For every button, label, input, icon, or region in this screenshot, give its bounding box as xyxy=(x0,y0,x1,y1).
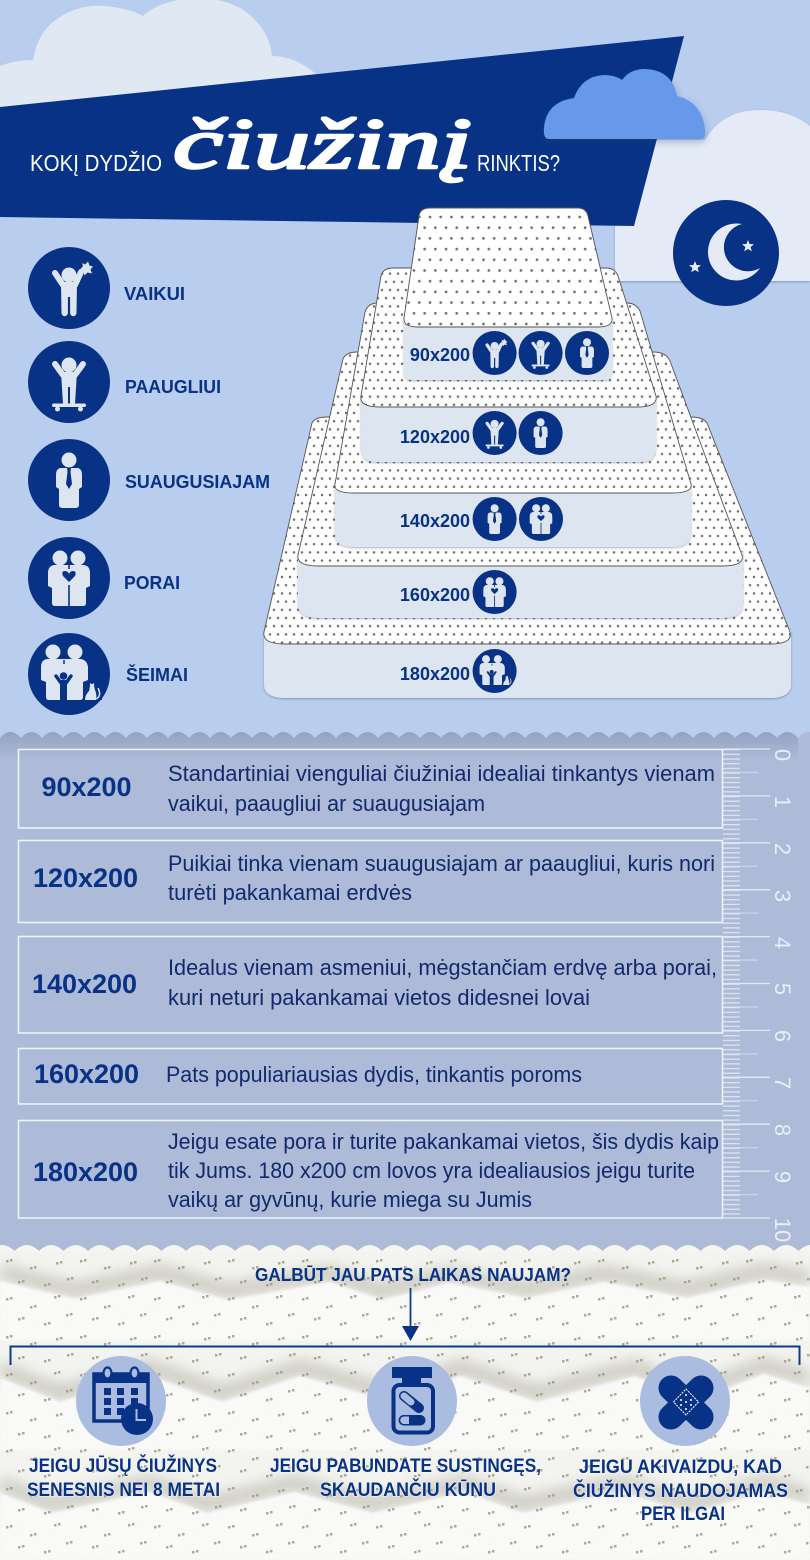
size row 120x200 xyxy=(18,840,722,922)
size row 140x200 xyxy=(18,936,722,1033)
size row 120x200: turėti pakankamai erdvės xyxy=(168,880,412,905)
legend item: child: VAIKUI xyxy=(124,283,185,304)
size row 180x200 xyxy=(18,1120,722,1218)
icon: pill bottle xyxy=(367,1356,457,1446)
mattress stack xyxy=(264,208,791,698)
size row 160x200 xyxy=(18,1048,722,1104)
legend item: adult: SUAUGUSIAJAM xyxy=(125,471,270,492)
size row 90x200: Standartiniai vienguliai čiužiniai idealiai tinkantys vienam xyxy=(168,761,715,786)
sign: stiffness: SKAUDANČIU KŪNU xyxy=(320,1479,496,1501)
mattress 140x200 xyxy=(335,303,691,547)
size row 180x200: 180x200 xyxy=(33,1157,138,1187)
bracket xyxy=(10,1346,800,1365)
mattress 180x200 xyxy=(264,417,791,698)
size row 120x200: 120x200 xyxy=(33,863,138,893)
size label 140x200: 140x200 xyxy=(400,511,470,531)
panel: size descriptions background xyxy=(0,732,810,1260)
icon: child xyxy=(473,331,517,375)
sign: calendar: SENESNIS NEI 8 METAI xyxy=(27,1480,220,1501)
arrow xyxy=(402,1288,419,1341)
icon: teen xyxy=(473,411,517,455)
icon: adult xyxy=(473,497,517,541)
legend item: child xyxy=(28,247,185,329)
size label 120x200: 120x200 xyxy=(400,427,470,447)
sky background xyxy=(0,0,810,745)
caption: JEIGU AKIVAIZDU, KAD xyxy=(579,1457,782,1478)
legend item: teen xyxy=(28,341,221,423)
ruler numbers: 10 xyxy=(770,1218,795,1242)
sign: stiffness xyxy=(270,1356,541,1501)
legend item: family xyxy=(28,633,188,715)
icon: couple xyxy=(519,497,563,541)
legend item: couple: PORAI xyxy=(124,572,180,593)
cloud: top left xyxy=(0,0,316,110)
size row 90x200: 90x200 xyxy=(41,772,132,802)
icon: adult xyxy=(565,331,609,375)
ruler numbers xyxy=(770,749,795,1242)
ruler numbers: 0 xyxy=(770,749,795,761)
mattress 120x200 xyxy=(361,268,656,462)
size label 180x200: 180x200 xyxy=(400,664,470,684)
legend item: teen: PAAUGLIUI xyxy=(125,376,221,397)
size row 180x200: vaikų ar gyvūnų, kurie miega su Jumis xyxy=(168,1187,532,1212)
ruler numbers: 9 xyxy=(770,1171,795,1183)
size row 90x200: vaikui, paaugliui ar suaugusiajam xyxy=(168,791,485,816)
size row 120x200: Puikiai tinka vienam suaugusiajam ar paaugliui, kuris nori xyxy=(168,851,715,876)
ruler numbers: 8 xyxy=(770,1124,795,1136)
size row 140x200: Idealus vienam asmeniui, mėgstančiam erdvę arba porai, xyxy=(168,955,717,980)
ruler numbers: 1 xyxy=(770,796,795,808)
legend: audience types xyxy=(28,247,270,715)
mattress 90x200 xyxy=(404,208,612,380)
size row 180x200: Jeigu esate pora ir turite pakankamai vietos, šis dydis kaip xyxy=(168,1129,719,1154)
caption: JEIGU PABUNDATE SUSTINGĘS, xyxy=(270,1456,541,1477)
legend item: couple xyxy=(28,537,180,619)
title: lead-in: KOKĮ DYDŽIO xyxy=(30,150,162,176)
ruler numbers: 5 xyxy=(770,983,795,995)
size row 140x200: kuri neturi pakankamai vietos didesnei lovai xyxy=(168,985,590,1010)
mattress 160x200 xyxy=(298,352,743,618)
size row 180x200: tik Jums. 180 x200 cm lovos yra idealiausios jeigu turite xyxy=(168,1158,695,1183)
sign: worn mattress: ČIUŽINYS NAUDOJAMAS xyxy=(573,1480,788,1502)
ruler numbers: 3 xyxy=(770,890,795,902)
icon: calendar and clock xyxy=(76,1356,166,1446)
size row 90x200 xyxy=(18,750,722,828)
size row 160x200: Pats populiariausias dydis, tinkantis poroms xyxy=(166,1062,582,1087)
title banner xyxy=(0,36,684,226)
icon: bandage xyxy=(640,1356,730,1446)
caption: JEIGU JŪSŲ ČIUŽINYS xyxy=(29,1455,217,1477)
ruler xyxy=(723,749,795,1242)
title: tail: RINKTIS? xyxy=(477,150,560,176)
size row 160x200: 160x200 xyxy=(34,1059,139,1089)
title: main word: čiužinį xyxy=(173,104,472,184)
sign: worn mattress: PER ILGAI xyxy=(641,1504,725,1525)
cloud: blue xyxy=(544,69,705,139)
sign: calendar xyxy=(27,1356,220,1501)
size label 90x200: 90x200 xyxy=(410,345,470,365)
heading: replacement question: GALBŪT JAU PATS LAIKAS NAUJAM? xyxy=(255,1265,571,1285)
icon: moon and stars xyxy=(673,200,779,306)
ruler numbers: 4 xyxy=(770,937,795,949)
cloud: right behind moon xyxy=(615,110,810,281)
legend item: adult xyxy=(28,439,270,521)
icon: teen xyxy=(519,331,563,375)
icon: adult xyxy=(519,411,563,455)
size row 140x200: 140x200 xyxy=(32,969,137,999)
icon: couple xyxy=(473,570,517,614)
size label 160x200: 160x200 xyxy=(400,585,470,605)
sign: worn mattress xyxy=(573,1356,788,1525)
legend item: family: ŠEIMAI xyxy=(126,664,188,685)
ruler numbers: 2 xyxy=(770,843,795,855)
icon: family xyxy=(473,649,517,693)
panel: mattress fabric background xyxy=(0,1245,810,1560)
ruler numbers: 6 xyxy=(770,1030,795,1042)
ruler numbers: 7 xyxy=(770,1077,795,1089)
